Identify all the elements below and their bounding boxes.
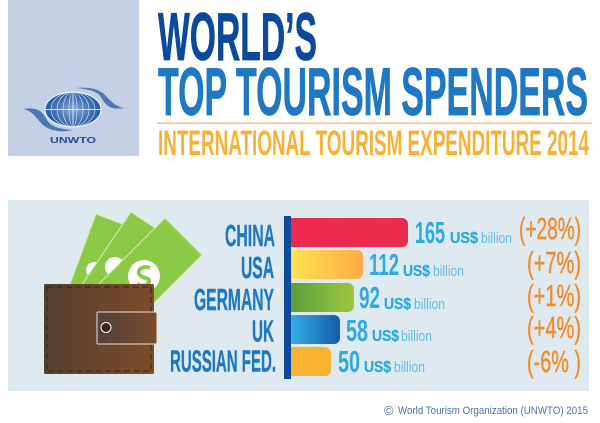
icon: banknote back xyxy=(66,214,130,295)
percentage changes xyxy=(519,211,581,379)
bar: China xyxy=(291,218,408,247)
value: Russian Fed. xyxy=(338,344,425,379)
country labels xyxy=(170,218,276,378)
value: China: US$ xyxy=(450,230,478,247)
value: Germany: US$ xyxy=(384,296,411,313)
bar chart xyxy=(284,216,408,379)
text: RUSSIAN FED. xyxy=(170,344,276,378)
country labels: USA xyxy=(241,250,274,285)
value: UK: billion xyxy=(401,328,432,345)
country labels: CHINA xyxy=(225,218,275,253)
panel: chart background xyxy=(8,200,589,391)
value: China: billion xyxy=(481,230,512,247)
value: UK: US$ xyxy=(372,328,399,345)
chart axis xyxy=(284,216,291,379)
text: UNWTO: UNWTO xyxy=(50,135,97,145)
value: USA: US$ xyxy=(403,263,430,280)
value: China: 165 xyxy=(415,215,445,250)
icon: left swoosh xyxy=(23,108,72,131)
icon: right swoosh xyxy=(76,88,124,109)
value: Russian Fed.: billion xyxy=(394,359,425,376)
value: Russian Fed.: 50 xyxy=(338,344,360,379)
icon: banknote middle xyxy=(75,212,170,300)
value: USA: billion xyxy=(433,263,464,280)
bar: UK xyxy=(291,315,340,344)
value: Germany xyxy=(359,280,445,315)
value: USA xyxy=(369,247,464,282)
country labels: UK xyxy=(252,314,274,348)
bar: Germany xyxy=(291,283,354,312)
value: China xyxy=(415,215,512,250)
value: Russian Fed.: US$ xyxy=(364,359,391,376)
icon: wallet strap xyxy=(97,312,157,344)
footer credit: © xyxy=(384,403,394,418)
panel: UNWTO logo xyxy=(8,0,139,156)
icon: globe xyxy=(45,92,101,127)
bar: USA xyxy=(291,250,363,279)
icon: wallet body xyxy=(44,284,154,374)
value: Germany: billion xyxy=(414,296,445,313)
icon: banknote front xyxy=(98,218,202,322)
text: WORLD’S xyxy=(158,0,317,75)
value: USA: 112 xyxy=(369,247,399,282)
bar: Russian Fed. xyxy=(291,347,331,376)
value: Germany: 92 xyxy=(359,280,380,315)
icon: wallet with banknotes xyxy=(44,212,202,374)
divider line xyxy=(157,122,592,124)
value: UK: 58 xyxy=(346,313,368,348)
country labels: GERMANY xyxy=(194,282,274,317)
value: UK xyxy=(346,313,432,348)
values xyxy=(338,215,512,379)
